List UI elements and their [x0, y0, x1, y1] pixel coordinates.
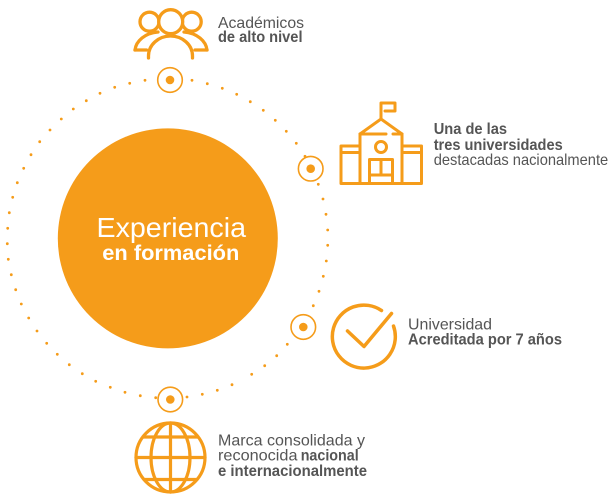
text: university ranking — [434, 121, 608, 169]
icon: globe — [136, 423, 205, 492]
title line 2: en formación — [102, 242, 239, 265]
text: brand recognition: reconocida — [218, 448, 298, 464]
node: upper right — [298, 156, 323, 181]
central circle with title — [58, 128, 278, 348]
dotted orbit ring — [7, 80, 328, 398]
text: brand recognition: nacional — [301, 448, 359, 464]
text: brand recognition: e internacionalmente — [218, 463, 367, 480]
text: accreditation — [408, 316, 562, 348]
title line 1: Experiencia — [96, 212, 246, 243]
text: accreditation: Acreditada por 7 años — [408, 332, 562, 348]
text: accreditation: Universidad — [408, 316, 492, 334]
text: university ranking: tres universidades — [434, 137, 563, 154]
node: lower right — [291, 315, 316, 339]
text: brand recognition: Marca consolidada y — [218, 432, 365, 450]
text: academics: Académicos — [218, 15, 304, 32]
text: brand recognition — [218, 432, 367, 480]
icon: university building — [341, 103, 422, 184]
text: university ranking: Una de las — [434, 121, 507, 138]
text: academics: de alto nivel — [218, 29, 302, 46]
icon: accreditation check mark — [332, 305, 395, 368]
node: top — [158, 68, 182, 92]
node: bottom — [158, 387, 183, 412]
icon: academics group of people — [135, 10, 207, 58]
text: academics — [218, 15, 304, 46]
